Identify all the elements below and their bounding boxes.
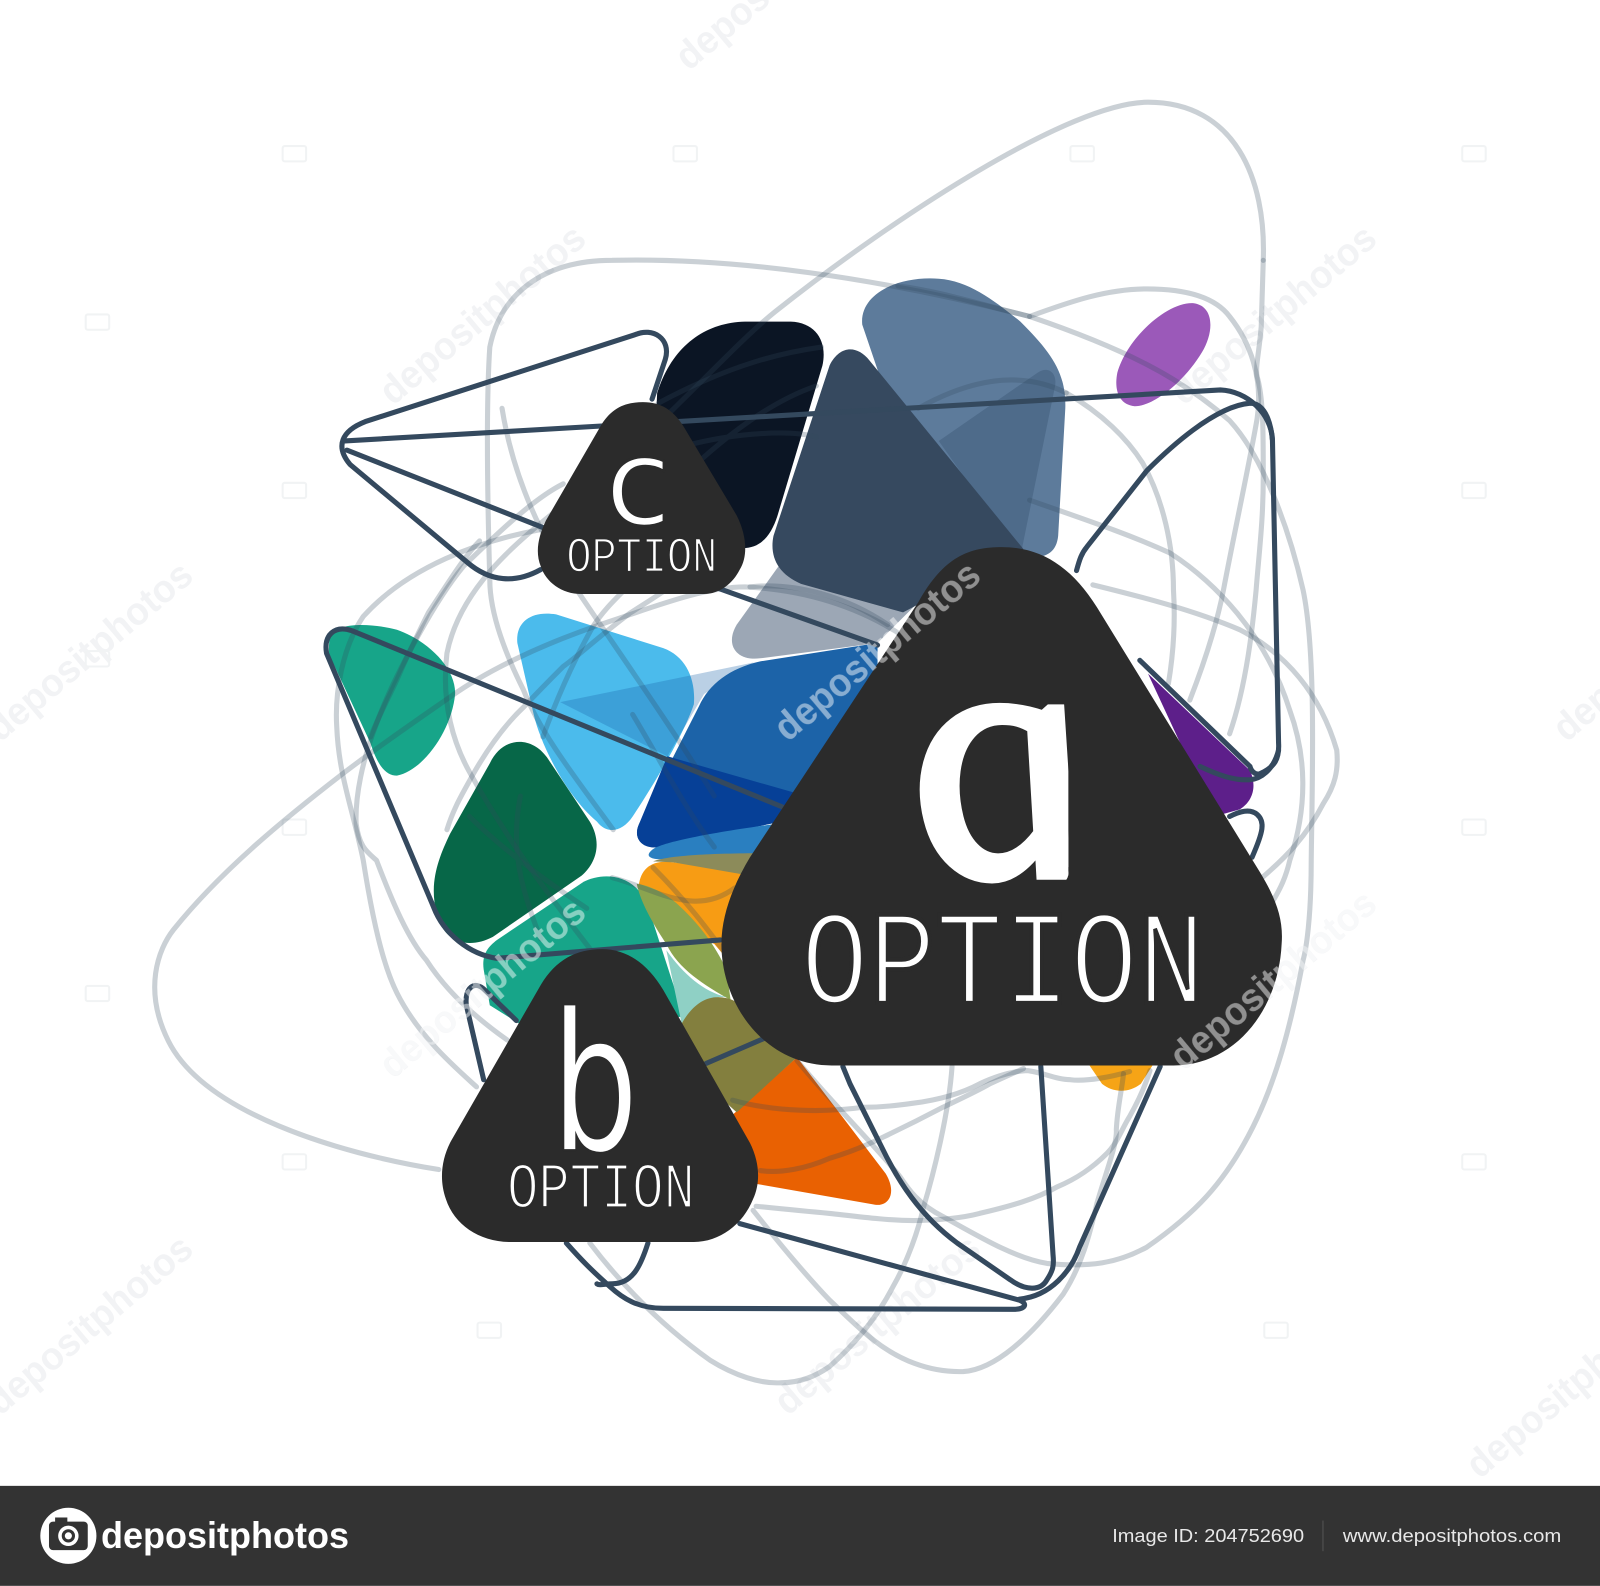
shape: navy rounded bbox=[653, 322, 824, 548]
letter a: a bbox=[851, 557, 1135, 953]
faint watermarks on background: depositphotos bbox=[371, 216, 594, 413]
faint watermarks on background: depositphotos bbox=[371, 890, 594, 1087]
icon: camera logo bbox=[40, 1508, 96, 1564]
gray scribble lines bbox=[155, 102, 1337, 1383]
option a badge bbox=[721, 547, 1282, 1065]
faint watermarks on background: depositphotos bbox=[1162, 882, 1385, 1078]
faint watermarks on background: depositphotos bbox=[766, 1226, 989, 1423]
shape: teal left bbox=[329, 625, 455, 776]
shape: yellow bit bbox=[1087, 1061, 1155, 1091]
outline: bottom triangle bbox=[566, 1224, 1025, 1309]
shape: dark olive bbox=[682, 997, 797, 1112]
outline: lower left bbox=[466, 985, 765, 1080]
shape: light teal bbox=[666, 950, 727, 1024]
letter b: b bbox=[551, 973, 639, 1196]
dark outline triangles bbox=[326, 332, 1279, 1309]
shape: blue bbox=[637, 643, 878, 847]
label OPTION: OPTION bbox=[566, 531, 717, 588]
letter c: c bbox=[605, 414, 671, 554]
shape: deep purple bbox=[1148, 674, 1253, 816]
shape: deep orange bbox=[730, 1057, 891, 1205]
outline: small loop bbox=[597, 1243, 648, 1285]
shape: light blue bbox=[517, 614, 694, 830]
logo wordmark: depositphotos bbox=[101, 1515, 349, 1556]
label OPTION: OPTION bbox=[507, 1153, 695, 1227]
faint watermarks on background: depositphotos bbox=[1162, 216, 1385, 413]
label OPTION: OPTION bbox=[801, 892, 1205, 1044]
shape: orange bbox=[639, 862, 776, 980]
outline: return line bbox=[1200, 750, 1279, 780]
shape: dark slate triangle bbox=[772, 349, 1023, 612]
shape: purple ellipse bbox=[1116, 303, 1210, 406]
shape: olive strip bbox=[653, 853, 760, 876]
colored shapes bbox=[329, 278, 1253, 1205]
watermarks over artwork bbox=[371, 553, 1385, 1087]
outline: teal triangle bbox=[326, 629, 786, 958]
shape: olive green overlap bbox=[637, 884, 731, 1000]
option b badge bbox=[442, 949, 758, 1242]
outline: right hanging bbox=[843, 1066, 1053, 1288]
outline: inner top right bbox=[1077, 403, 1272, 571]
watermarks over artwork: depositphotos bbox=[766, 553, 989, 750]
outline: top-left triangle bbox=[342, 332, 667, 579]
shape: translucent blue band bbox=[560, 662, 754, 756]
shape: blue-gray rounded bbox=[862, 278, 1065, 557]
image id: Image ID: 204752690 bbox=[1112, 1525, 1304, 1546]
shape: thin blue strip bbox=[649, 823, 786, 859]
shape: dark blue overlap bbox=[637, 756, 806, 847]
faint camera marks bbox=[86, 146, 1486, 1338]
outline: diagonal through c bbox=[347, 450, 878, 645]
shape: teal lower bbox=[483, 876, 684, 1031]
option c badge bbox=[538, 402, 745, 594]
shape: dark green bbox=[434, 742, 597, 943]
watermarks over artwork: depositphotos bbox=[1162, 882, 1385, 1078]
footer bar bbox=[0, 1486, 1600, 1586]
outline: long top triangle bbox=[345, 390, 1279, 774]
shape: inner blue-gray triangle bbox=[939, 370, 1055, 556]
watermarks over artwork: depositphotos bbox=[371, 890, 594, 1087]
shape: light gray bbox=[732, 563, 918, 659]
website: www.depositphotos.com bbox=[1342, 1525, 1561, 1546]
